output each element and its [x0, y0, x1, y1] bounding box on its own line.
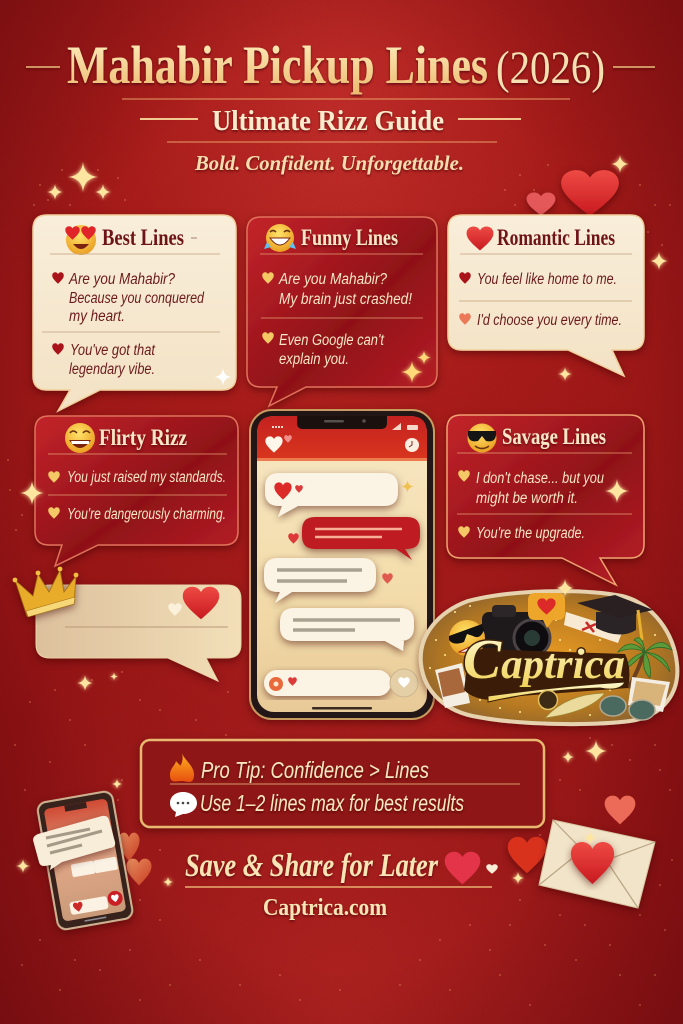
panel: funny lines: Are you Mahabir? [278, 271, 387, 288]
icon: red heart emoji [467, 227, 493, 250]
panel: best lines [33, 215, 236, 411]
blank bubble [36, 585, 241, 681]
panel: funny lines: explain you. [279, 351, 349, 368]
logo: glitter [430, 606, 666, 715]
panel: romantic lines [448, 215, 644, 376]
title: (2026) [496, 42, 605, 94]
panel: best lines: You've got that [70, 342, 156, 359]
pro tip panel: Use 1–2 lines max for best results [200, 790, 464, 816]
logo: palm [618, 638, 672, 688]
sparkles near logo [77, 579, 574, 691]
save and share: Save & Share for Later [185, 848, 439, 884]
envelope [539, 820, 655, 908]
hearts top right [527, 170, 619, 216]
logo: camera [482, 605, 550, 656]
icon: flame [170, 753, 194, 782]
panel: best lines: Because you conquered [69, 290, 205, 307]
chat bubble 2 [288, 517, 420, 560]
small phone chat bubble [33, 816, 115, 870]
chat bubble 3 [264, 558, 393, 603]
logo: wordmark backing [464, 648, 629, 700]
pro tip panel [141, 740, 544, 827]
chat bubble 1 [265, 473, 414, 517]
panel: best lines: Are you Mahabir? [68, 271, 175, 288]
sparkles top [47, 155, 668, 381]
icon: crown [13, 567, 78, 617]
icon: grinning emoji [65, 423, 95, 453]
subtitle [122, 99, 570, 142]
logo: wordmark: Captrica [463, 629, 625, 691]
phone [250, 410, 434, 719]
icon: heart eyes emoji [65, 225, 96, 255]
logo: aperture [538, 690, 558, 710]
hearts behind small phone [118, 833, 151, 885]
sparkle left [20, 481, 44, 505]
website: Captrica.com [263, 895, 387, 921]
panel: best lines: legendary vibe. [69, 361, 155, 378]
icon: laughing emoji [264, 224, 296, 252]
panel: flirty rizz: Flirty Rizz [99, 425, 187, 450]
panel: romantic lines: Romantic Lines [497, 225, 615, 250]
icon: speech bubble [170, 792, 197, 817]
panel: funny lines: Even Google can't [279, 332, 385, 349]
logo: right polaroid [628, 677, 670, 712]
sparkles bottom [16, 740, 607, 887]
logo: swoosh [488, 682, 625, 702]
panel: flirty rizz [35, 416, 238, 566]
envelope with hearts [508, 796, 655, 908]
panel: best lines: my heart. [69, 308, 125, 325]
panel: funny lines [247, 217, 437, 406]
captrica logo sticker [421, 591, 677, 724]
logo: graduation cap [577, 595, 653, 640]
panel: funny lines: My brain just crashed! [279, 291, 413, 308]
message input [264, 669, 418, 697]
logo: sunglasses [600, 696, 655, 720]
panel: flirty rizz: You just raised my standards. [67, 469, 226, 486]
logo: sunglasses emoji [449, 620, 485, 656]
logo: heart chat [528, 593, 565, 628]
tagline: Bold. Confident. Unforgettable. [194, 151, 464, 175]
phone header [257, 416, 427, 461]
panel: romantic lines: You feel like home to me. [477, 271, 617, 288]
panel: savage lines [447, 415, 644, 585]
subtitle: Ultimate Rizz Guide [212, 105, 444, 137]
panel: savage lines: Savage Lines [502, 424, 606, 449]
chat bubble 4 [280, 608, 414, 651]
panel: flirty rizz: You're dangerously charming. [67, 506, 226, 523]
logo: diploma [564, 612, 623, 643]
panel: savage lines: I don't chase... but you [476, 470, 604, 487]
title: Mahabir Pickup Lines [67, 35, 488, 95]
icon: sunglasses emoji [468, 424, 496, 452]
panel: savage lines: might be worth it. [476, 490, 578, 507]
small phone illustration [36, 790, 134, 931]
panel: best lines: Best Lines [102, 225, 184, 250]
panel: romantic lines: I'd choose you every time. [477, 312, 622, 329]
panel: funny lines: Funny Lines [301, 225, 398, 250]
panel: savage lines: You're the upgrade. [476, 525, 585, 542]
logo: left polaroid [435, 663, 470, 708]
pro tip panel: Pro Tip: Confidence > Lines [201, 757, 429, 783]
logo: feather [545, 693, 605, 718]
